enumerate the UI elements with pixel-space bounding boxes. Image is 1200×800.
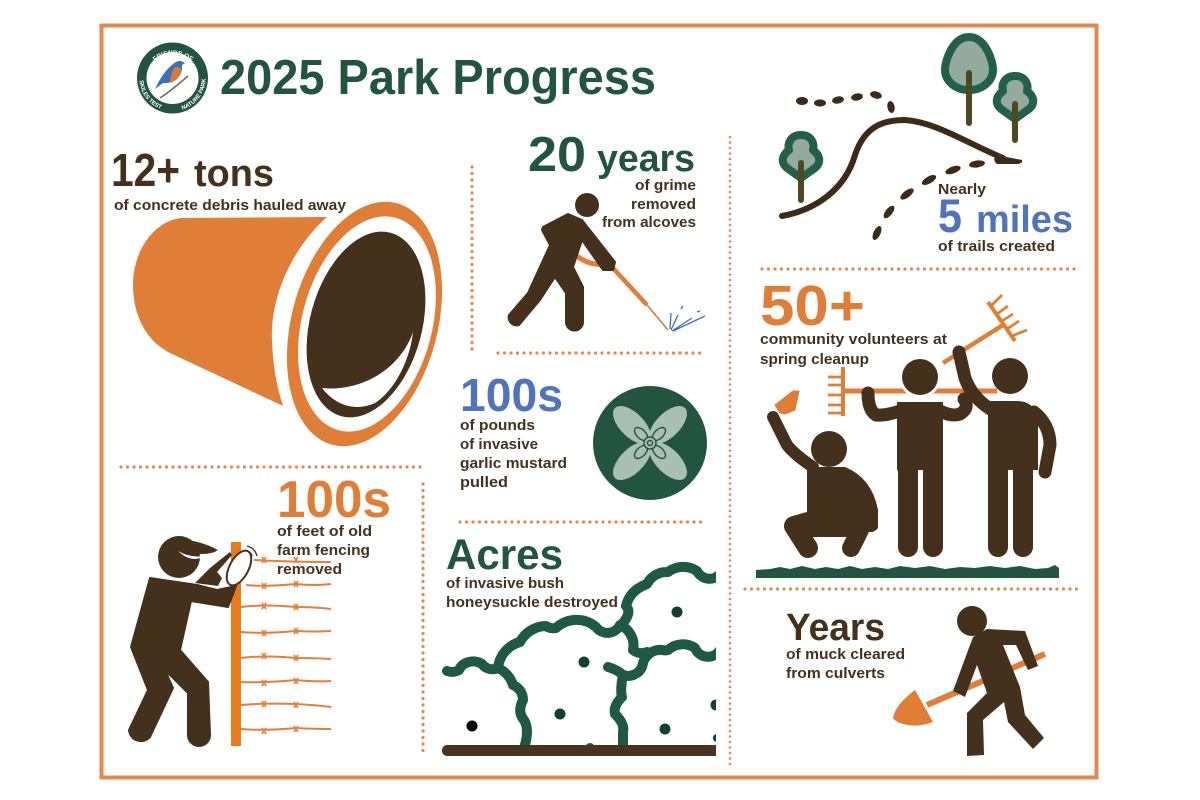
panel: grime removed xyxy=(509,128,705,331)
icon: volunteers xyxy=(773,352,1050,548)
stat: Years: Years xyxy=(786,607,885,649)
stat: 100s feet: 100s xyxy=(277,471,391,529)
caption: garlic mustard: of pounds xyxy=(460,417,535,434)
caption: volunteers: community volunteers at xyxy=(760,331,947,348)
icon: rakes and trowel xyxy=(775,295,1027,416)
caption: volunteers xyxy=(760,331,947,368)
stat: 100s pounds: 100s xyxy=(460,369,563,421)
icon: concrete pipe xyxy=(133,184,467,464)
caption: fencing: removed xyxy=(277,561,342,578)
panel: volunteers xyxy=(756,274,1059,578)
caption: culverts xyxy=(786,646,905,682)
icon: fence post and barbed wire xyxy=(231,542,331,746)
title: 2025 Park Progress xyxy=(220,51,656,105)
caption: fencing: farm fencing xyxy=(277,542,370,559)
icon: person power washing xyxy=(509,193,705,331)
stat: 12+ tons xyxy=(111,144,274,196)
stat: 50+: 50+ xyxy=(760,274,865,338)
panel: culverts xyxy=(786,606,1045,756)
caption: culverts: of muck cleared xyxy=(786,646,905,663)
icon: person removing fence xyxy=(129,536,257,746)
caption: honeysuckle: of invasive bush xyxy=(446,575,564,592)
caption: grime: of grime xyxy=(635,177,696,194)
panel: farm fencing xyxy=(129,471,391,746)
stat: 20 years: 20 xyxy=(528,128,586,182)
stat: 12+ tons: tons xyxy=(194,153,274,195)
caption: garlic mustard xyxy=(460,417,567,491)
stat: 12+ tons: 12+ xyxy=(111,144,180,196)
caption: garlic mustard: of invasive xyxy=(460,436,538,453)
caption: grime xyxy=(602,177,696,231)
caption: fencing: of feet of old xyxy=(277,523,372,540)
stat: 5 miles xyxy=(938,189,1073,242)
caption: grime: from alcoves xyxy=(602,214,696,231)
stat: 5 miles: miles xyxy=(976,199,1073,241)
icon: trees xyxy=(783,37,1033,200)
stat: Acres: Acres xyxy=(446,531,563,579)
caption: honeysuckle: honeysuckle destroyed xyxy=(446,594,618,611)
caption: garlic mustard: garlic mustard xyxy=(460,455,567,472)
logo: Friends of Skiles Test Nature Park: SKILES TEST xyxy=(140,80,162,108)
logo: Friends of Skiles Test Nature Park: NATURE PARK xyxy=(181,78,206,110)
icon: honeysuckle bushes xyxy=(442,567,732,756)
caption: fencing xyxy=(277,523,372,578)
icon: person shoveling xyxy=(953,606,1044,756)
panel: concrete debris xyxy=(111,144,467,464)
caption: honeysuckle xyxy=(446,575,618,611)
panel: garlic mustard xyxy=(460,369,707,500)
caption: concrete debris: of concrete debris hauled away xyxy=(114,197,347,214)
icon: grass strip xyxy=(756,565,1059,578)
caption: culverts: from culverts xyxy=(786,665,885,682)
icon: shovel xyxy=(893,654,1045,726)
panel: honeysuckle xyxy=(442,531,732,756)
label: Nearly: Nearly xyxy=(938,181,987,198)
stat: 20 years: years xyxy=(597,138,695,180)
logo: Friends of Skiles Test Nature Park: FRIENDS OF xyxy=(152,50,194,60)
icon: trail paths xyxy=(782,90,1022,241)
caption: garlic mustard: pulled xyxy=(460,474,508,491)
caption: trails: of trails created xyxy=(938,238,1055,255)
caption: volunteers: spring cleanup xyxy=(760,351,869,368)
page border xyxy=(102,26,1096,778)
icon: garlic mustard flower xyxy=(593,386,707,500)
panel: trails xyxy=(782,37,1073,255)
logo: Friends of Skiles Test Nature Park xyxy=(137,42,208,114)
caption: grime: removed xyxy=(631,196,696,213)
stat: 20 years xyxy=(528,128,695,182)
stat: 5 miles: 5 xyxy=(938,189,962,242)
